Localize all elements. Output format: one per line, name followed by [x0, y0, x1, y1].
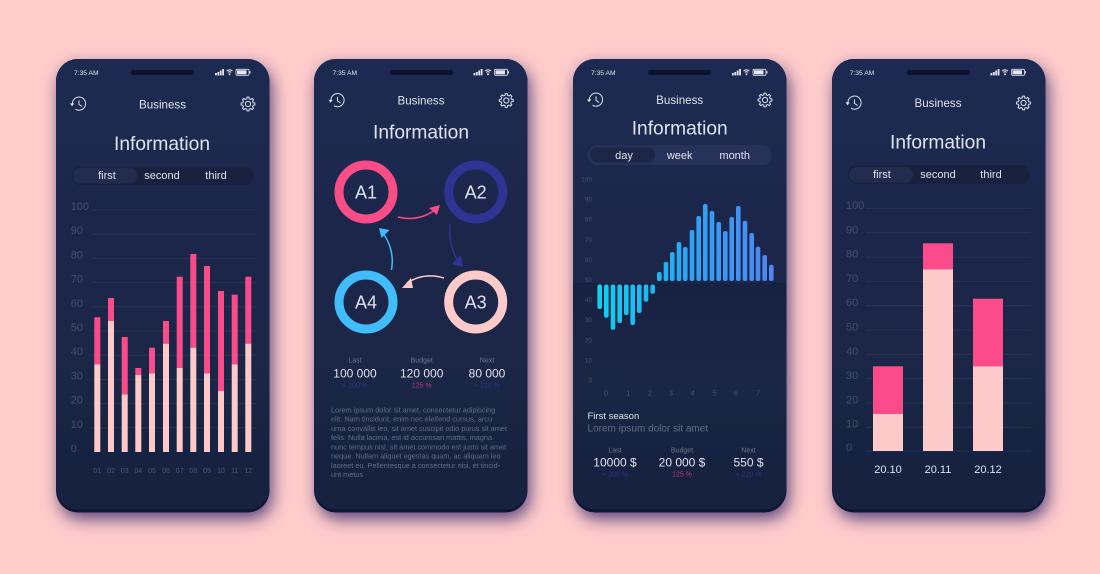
caption: First season: [588, 411, 639, 422]
bar chart: 0: [846, 442, 852, 454]
node A4: [339, 275, 393, 329]
body text: neque. Nullam aliquet egestas quam, ac aliquam leo: [331, 452, 501, 461]
bar chart: 6: [734, 390, 738, 398]
status time: 7:35 AM: [74, 70, 99, 77]
tabs: second: [920, 169, 956, 181]
status time: 7:35 AM: [591, 70, 616, 77]
stat: next: Next: [480, 358, 494, 364]
stat: next: [733, 448, 764, 478]
heading: Information: [373, 123, 469, 144]
caption: [588, 411, 708, 434]
arrow A4 to A1: [379, 228, 392, 270]
tabs: first: [873, 169, 891, 181]
stat: last: [593, 448, 637, 478]
bar chart: 10: [71, 419, 83, 431]
stat: last: Last: [608, 448, 622, 454]
bar chart: 50: [71, 322, 83, 334]
status time: 7:35 AM: [850, 70, 875, 77]
bar chart: 20.12: [974, 464, 1002, 476]
tabs: [848, 165, 1030, 184]
bar chart: 7: [756, 390, 760, 398]
status icons: [474, 69, 509, 75]
bar chart: 1: [626, 390, 630, 398]
bar chart: 90: [71, 225, 83, 237]
bar chart: 100: [581, 176, 592, 184]
icon: settings gear: [499, 94, 513, 107]
bar chart: 10: [217, 468, 225, 475]
stat: budget: Budget: [411, 358, 433, 364]
phone body: [56, 59, 270, 512]
body text: felis. Nulla lacinia, est id accumsan mattis, magna: [331, 433, 493, 442]
stat: next: 550 $: [733, 456, 764, 470]
stat: next: [469, 358, 506, 390]
icon: history: [846, 96, 861, 109]
stat: last: + 200 %: [342, 382, 368, 390]
notch: [648, 70, 711, 75]
tabs: third: [205, 170, 227, 182]
bar chart: 100: [71, 201, 89, 213]
body text: laoreet eu. Pellentesque a consectetur nisi, et tincid-: [331, 461, 501, 470]
bar chart: 07: [176, 468, 184, 475]
node A4: A4: [355, 292, 377, 312]
phone body: [832, 59, 1046, 512]
stat: next: + 220 %: [474, 382, 500, 390]
body text: unt metus: [331, 470, 363, 479]
screen title: Business: [914, 97, 962, 110]
icon: settings gear: [1017, 96, 1030, 110]
stat: budget: 125 %: [672, 472, 692, 478]
screen title: Business: [139, 98, 186, 111]
bar chart: 12: [244, 468, 252, 475]
bar chart: 50: [585, 277, 592, 284]
notch: [131, 70, 194, 75]
status icons: [732, 69, 768, 75]
stat: budget: [659, 448, 706, 478]
status time: 7:35 AM: [332, 70, 357, 77]
notch: [907, 70, 970, 75]
tabs: third: [980, 169, 1002, 181]
bar chart: 70: [846, 273, 858, 285]
bar chart: 20.11: [925, 464, 951, 476]
node A2: [449, 165, 503, 219]
bar chart: 06: [162, 468, 170, 475]
icon: history: [328, 94, 344, 107]
tabs: [588, 145, 772, 165]
bar chart: 80: [585, 217, 592, 224]
tabs: first: [98, 170, 116, 182]
phone 1: stacked thin bar chart: [56, 59, 270, 512]
body text: urna convallis leo, sit amet suscipit odio purus sit amet: [331, 424, 507, 433]
bar chart: 20: [71, 395, 83, 407]
bar chart: 50: [846, 322, 858, 334]
bar chart: 0: [604, 390, 608, 398]
bar chart: 0: [71, 443, 77, 455]
icon: history: [587, 93, 603, 106]
bar chart: 90: [585, 197, 592, 204]
body text: Lorem ipsum dolor sit amet, consectetur adipiscing: [331, 406, 495, 414]
caption: Lorem ipsum dolor sit amet: [588, 424, 708, 434]
stat: last: [333, 358, 377, 390]
stat: budget: 20 000 $: [659, 456, 706, 470]
screen title: Business: [656, 94, 703, 107]
stat: budget: [400, 358, 444, 390]
node A3: [449, 275, 503, 329]
bar chart: 70: [585, 237, 592, 244]
notch: [390, 70, 453, 75]
tabs: month: [719, 150, 750, 162]
phone body: [314, 59, 528, 512]
screen title: Business: [397, 94, 445, 108]
icon: history: [70, 97, 86, 110]
bar chart: 03: [121, 468, 129, 475]
tabs: [72, 166, 254, 185]
bar chart: 04: [134, 468, 142, 475]
bar chart: 30: [846, 370, 858, 382]
bar chart: [846, 200, 1031, 476]
bar chart: 80: [846, 249, 858, 261]
heading: Information: [632, 118, 728, 140]
arrow A2 to A3: [450, 224, 463, 267]
tabs: day: [615, 150, 633, 162]
stat: last: 10000 $: [593, 456, 637, 470]
bar chart: 40: [846, 346, 858, 358]
bar chart: 02: [107, 468, 115, 475]
bar chart: [573, 176, 786, 398]
stat: last: 100 000: [333, 366, 377, 380]
bar chart: 60: [71, 298, 83, 310]
phone 2: cycle diagram: [314, 59, 528, 512]
stat: budget: 125 %: [412, 382, 432, 390]
bar chart: 10: [585, 357, 592, 364]
bar chart: 30: [585, 317, 592, 324]
bar chart: 20.10: [874, 464, 902, 476]
bar chart: 80: [71, 249, 83, 261]
bar chart: 90: [846, 224, 858, 236]
bar chart: 0: [588, 378, 592, 384]
icon: settings gear: [241, 97, 255, 111]
phone 3: diverging bar chart: [573, 59, 786, 512]
node A1: A1: [355, 182, 377, 202]
node A2: A2: [465, 182, 487, 202]
heading: Information: [890, 132, 986, 154]
node A3: A3: [465, 292, 487, 312]
arrow A1 to A2: [398, 205, 440, 218]
stat: last: + 200 %: [602, 472, 628, 478]
bar chart: 60: [585, 257, 592, 264]
arrow A3 to A4: [402, 276, 444, 288]
bar chart: 10: [846, 419, 858, 431]
stat: last: Last: [348, 358, 362, 364]
bar chart: 09: [203, 468, 211, 475]
tabs: second: [144, 170, 180, 182]
bar chart: 20: [846, 394, 858, 406]
bar chart: 4: [691, 390, 695, 398]
bar chart: 01: [93, 468, 101, 475]
bar chart: 20: [585, 337, 592, 344]
bar chart: 70: [71, 274, 83, 286]
node A1: [339, 165, 393, 219]
bar chart: 30: [71, 370, 83, 382]
bar chart: 08: [189, 468, 197, 475]
bar chart: 40: [585, 297, 592, 304]
bar chart: 100: [846, 200, 864, 212]
phone body: [573, 59, 786, 512]
status icons: [990, 69, 1026, 75]
bar chart: 2: [648, 390, 652, 398]
phone 4: stacked wide bar chart: [832, 59, 1046, 512]
bar chart: 40: [71, 346, 83, 358]
tabs: week: [666, 150, 693, 162]
stat: budget: 120 000: [400, 366, 444, 380]
bar chart: 3: [669, 390, 673, 398]
bar chart: 60: [846, 297, 858, 309]
stat: next: Next: [741, 448, 756, 454]
stat: next: 80 000: [469, 366, 506, 380]
icon: settings gear: [758, 93, 772, 107]
body text: elit. Nam tincidunt, enim nec eleifend cursus, arcu: [331, 415, 492, 424]
stat: budget: Budget: [671, 448, 693, 454]
bar chart: [71, 201, 256, 475]
heading: Information: [114, 134, 210, 155]
stat: next: + 220 %: [736, 472, 761, 478]
bar chart: 5: [713, 390, 717, 398]
bar chart: 05: [148, 468, 156, 475]
body text: nunc tempus nisl, sit amet commodo est justo sit amet: [331, 442, 506, 452]
bar chart: 11: [231, 468, 238, 475]
status icons: [215, 69, 250, 75]
